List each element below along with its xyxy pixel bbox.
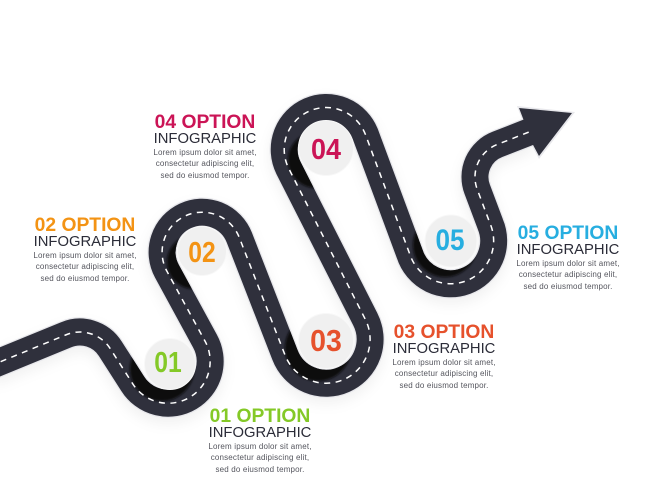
text block: 01 option: 01 OPTION [210,406,310,427]
text block: 03 option: sed do eiusmod tempor. [399,381,489,390]
text block: 01 option: Lorem ipsum dolor sit amet, [208,442,312,451]
text block: 05 option: consectetur adipiscing elit, [519,270,617,279]
marker 03 [298,314,354,368]
text block: 02 option: sed do eiusmod tempor. [40,274,130,283]
text block: 02 option [33,215,137,283]
text block: 04 option: sed do eiusmod tempor. [160,171,250,180]
text block: 05 option [516,223,620,291]
text block: 05 option: Lorem ipsum dolor sit amet, [516,259,620,268]
text block: 05 option: 05 OPTION [518,223,618,244]
text block: 01 option [208,406,312,474]
text block: 03 option: INFOGRAPHIC [393,341,495,357]
marker 05: 05 [435,223,465,256]
marker 02 [178,226,226,276]
arrowhead [519,108,572,156]
text block: 01 option: sed do eiusmod tempor. [215,465,305,474]
text block: 04 option: Lorem ipsum dolor sit amet, [153,148,257,157]
road centre dashes [0,108,529,403]
text block: 05 option: sed do eiusmod tempor. [523,282,613,291]
text block: 03 option: 03 OPTION [394,322,494,343]
text block: 01 option: consectetur adipiscing elit, [211,453,309,462]
text block: 04 option: INFOGRAPHIC [154,131,256,147]
text block: 02 option: INFOGRAPHIC [34,234,136,250]
marker shadows on road [130,132,477,401]
text block: 05 option: INFOGRAPHIC [517,242,619,258]
text block: 03 option: consectetur adipiscing elit, [395,369,493,378]
text block: 04 option: 04 OPTION [155,112,255,133]
marker 05 [425,215,477,267]
marker 03: 03 [310,324,342,358]
text block: 03 option [392,322,496,390]
road surface [0,108,529,403]
marker 02: 02 [188,236,216,268]
marker 04 [298,120,354,176]
marker 04: 04 [311,133,341,165]
text block: 04 option: consectetur adipiscing elit, [156,159,254,168]
arrowhead outline [517,106,575,159]
text block: 02 option: consectetur adipiscing elit, [36,262,134,271]
text block: 03 option: Lorem ipsum dolor sit amet, [392,358,496,367]
text block: 04 option [153,112,257,180]
road soft shadow [0,114,529,409]
text block: 02 option: 02 OPTION [35,215,135,236]
marker 01 [144,338,196,390]
text block: 02 option: Lorem ipsum dolor sit amet, [33,251,137,260]
text block: 01 option: INFOGRAPHIC [209,425,311,441]
marker 01: 01 [154,346,182,378]
road outline [0,108,529,403]
road map with arrow and number markers [0,92,575,422]
